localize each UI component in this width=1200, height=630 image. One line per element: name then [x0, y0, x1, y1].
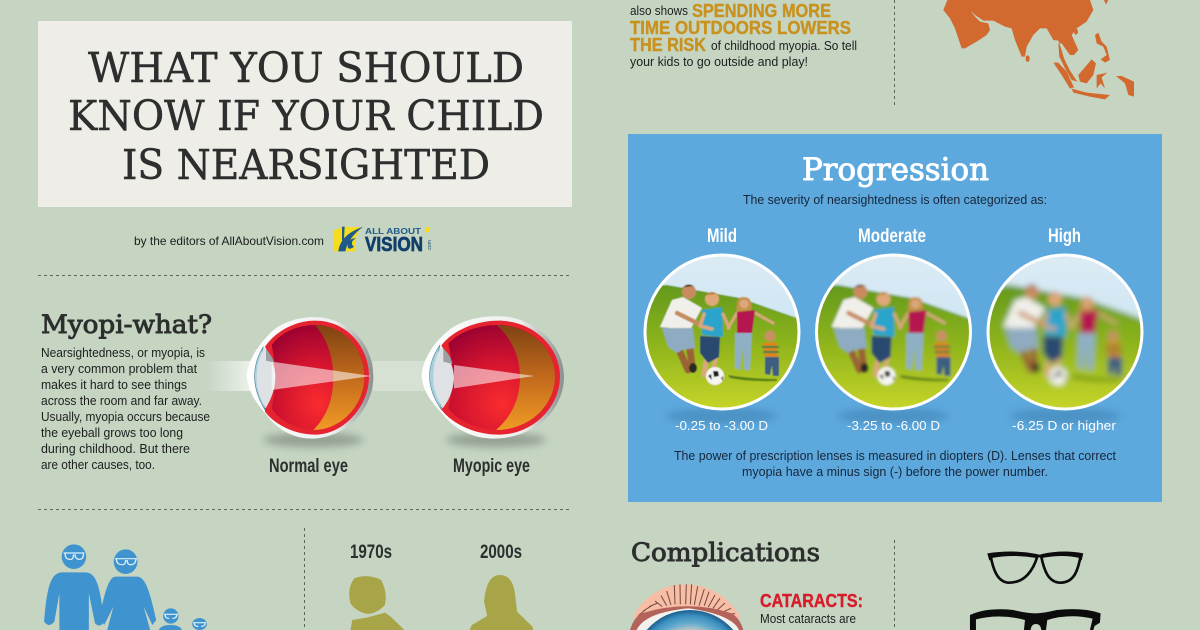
text block: time outdoors: your kids to go outside and play! [630, 55, 808, 69]
byline: by the editors of AllAboutVision.com [134, 234, 324, 248]
title panel: KNOW IF YOUR CHILD [68, 92, 544, 140]
heading: complications: Complications [631, 538, 820, 567]
icon: eye with cataract [630, 584, 743, 630]
text block: time outdoors: of childhood myopia. So tell [711, 39, 857, 53]
heading: Progression: Progression [802, 152, 989, 188]
text block: myopia explanation: are other causes, too. [41, 458, 155, 472]
text block: myopia explanation: Nearsightedness, or myopia, is [41, 346, 205, 360]
logo: All About Vision: .com [427, 240, 433, 251]
light beam entering normal eye [205, 361, 250, 391]
logo: All About Vision [334, 226, 433, 256]
text block: diopters note [674, 449, 1117, 479]
light beam entering myopic eye [373, 361, 425, 391]
icon: glasses bottom [970, 609, 1101, 630]
subheading: The severity of nearsightedness is often categorized as: [743, 193, 1047, 207]
text block: diopters note: myopia have a minus sign (-) before the power number. [742, 465, 1048, 479]
icon: glasses top [987, 551, 1083, 583]
text block: myopia explanation [41, 346, 210, 472]
text block: time outdoors [630, 1, 857, 69]
column: moderate [814, 226, 974, 433]
text block: cataracts description: Most cataracts are [760, 612, 856, 626]
text block: time outdoors: SPENDING MORE [692, 1, 831, 21]
column: moderate: -3.25 to -6.00 D [847, 418, 940, 433]
text block: myopia explanation: during childhood. But there [41, 442, 190, 456]
panel: progression [628, 134, 1162, 502]
text block: myopia explanation: across the room and far away. [41, 394, 202, 408]
logo: All About Vision: ALL ABOUT [365, 226, 422, 236]
title panel: WHAT YOU SHOULD [88, 44, 524, 92]
column: mild: -0.25 to -3.00 D [675, 418, 768, 433]
logo: All About Vision: VISION [365, 234, 423, 256]
icon: boy silhouette [349, 576, 404, 630]
text block: myopia explanation: makes it hard to see things [41, 378, 187, 392]
label: cataracts: CATARACTS: [760, 591, 863, 611]
text block: myopia explanation: a very common problem that [41, 362, 198, 376]
text block: time outdoors: TIME OUTDOORS LOWERS [630, 18, 851, 38]
heading: Myopi-what?: Myopi-what? [41, 310, 212, 339]
text block: time outdoors: also shows [630, 4, 688, 18]
label: 1970s: 1970s [350, 542, 392, 563]
title panel: IS NEARSIGHTED [122, 141, 490, 189]
text block: diopters note: The power of prescription lenses is measured in diopters (D). Lenses that correct [674, 449, 1117, 463]
icon: family with glasses [44, 544, 207, 630]
text block: myopia explanation: Usually, myopia occurs because [41, 410, 210, 424]
title panel [38, 21, 572, 207]
column: high: -6.25 D or higher [1012, 418, 1117, 433]
column: moderate: Moderate [858, 226, 926, 247]
column: mild [642, 226, 802, 433]
label: myopic eye: Myopic eye [453, 456, 530, 477]
column: high: High [1048, 226, 1081, 247]
icon: girl silhouette [470, 575, 533, 630]
column: mild: Mild [707, 226, 737, 247]
label: 2000s: 2000s [480, 542, 522, 563]
text block: time outdoors: THE RISK [630, 35, 706, 55]
column: high [985, 226, 1145, 433]
map: Asia [943, 0, 1134, 99]
icon: normal eye [247, 317, 373, 447]
icon: myopic eye [422, 316, 564, 447]
text block: myopia explanation: the eyeball grows too long [41, 426, 183, 440]
label: normal eye: Normal eye [269, 456, 348, 477]
